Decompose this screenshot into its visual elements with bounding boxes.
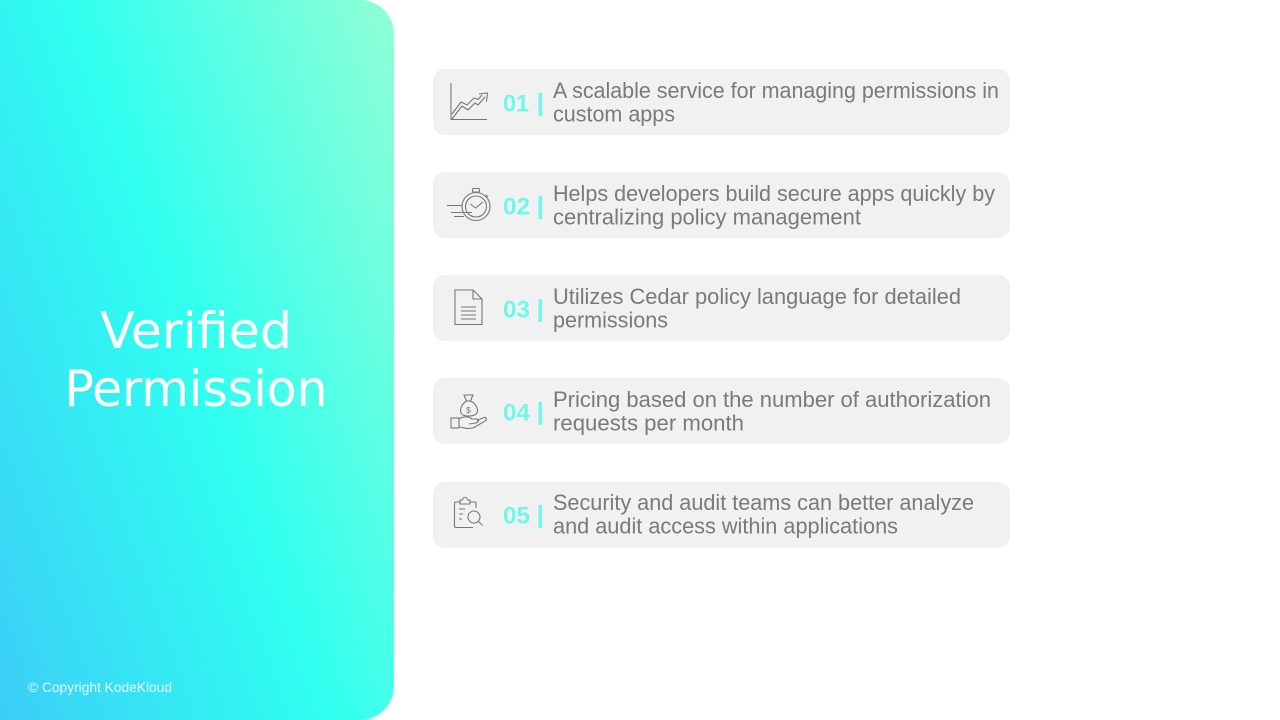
text 05 <box>553 490 974 538</box>
number 05: 05 <box>503 502 530 530</box>
item 02 <box>433 172 1010 238</box>
icon: money bag on hand <box>451 395 486 428</box>
number 03: 03 <box>503 296 530 324</box>
text 01 <box>553 78 999 126</box>
text 03: permissions <box>553 308 668 332</box>
title: Verified Permission: Permission <box>64 360 328 418</box>
number 02: 02 <box>503 194 530 220</box>
number 01: 01 <box>503 90 529 118</box>
text 01: A scalable service for managing permissions in <box>553 78 999 103</box>
item 03 <box>433 275 1010 341</box>
item 04 <box>433 378 1010 444</box>
divider bar <box>538 505 542 528</box>
icon: document <box>455 290 482 324</box>
title: Verified Permission <box>64 302 328 418</box>
text 02: centralizing policy management <box>553 204 862 230</box>
item 05 <box>433 482 1010 548</box>
divider bar <box>538 93 542 116</box>
text 05: Security and audit teams can better analyze <box>553 490 974 515</box>
title: Verified Permission: Verified <box>100 302 292 360</box>
text 03 <box>553 284 961 332</box>
divider bar <box>538 196 542 219</box>
text 04: requests per month <box>553 410 744 436</box>
divider bar <box>538 402 542 425</box>
text 01: custom apps <box>553 102 675 126</box>
text 04 <box>553 387 991 436</box>
text 02 <box>553 181 996 230</box>
copyright text: © Copyright KodeKloud <box>28 680 172 695</box>
number 04: 04 <box>503 400 531 426</box>
icon: growth chart <box>451 83 488 120</box>
icon: money bag on hand: $ <box>466 406 471 415</box>
divider bar <box>538 299 542 322</box>
left gradient panel <box>0 0 394 720</box>
text 04: Pricing based on the number of authorization <box>553 387 991 412</box>
text 03: Utilizes Cedar policy language for detailed <box>553 284 961 309</box>
text 02: Helps developers build secure apps quickly by <box>553 181 996 206</box>
icon: clipboard with magnifier <box>454 497 482 528</box>
text 05: and audit access within applications <box>553 514 898 538</box>
item 01 <box>433 69 1010 135</box>
icon: stopwatch <box>447 188 490 220</box>
